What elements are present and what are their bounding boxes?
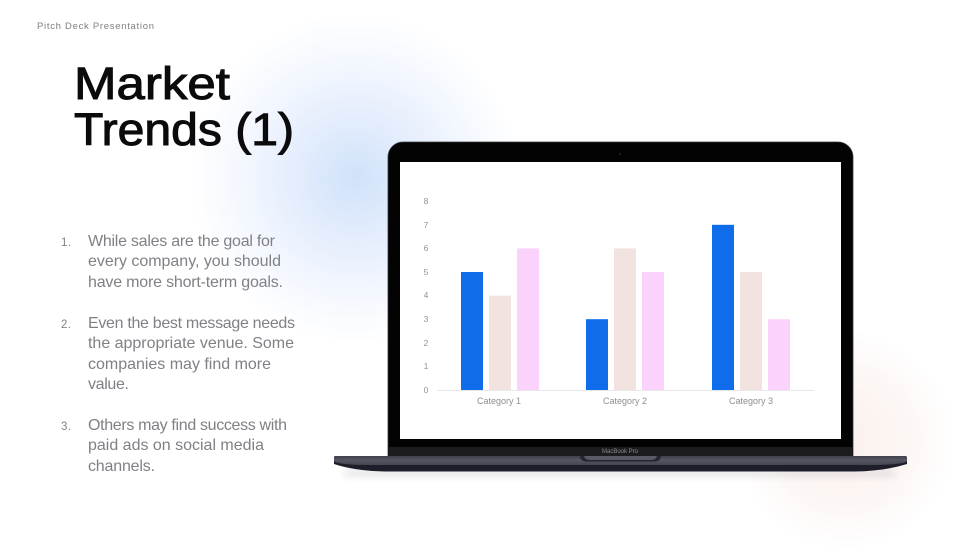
y axis labels: 6 — [424, 243, 429, 253]
list item 1 — [61, 233, 283, 291]
y axis labels: 7 — [424, 220, 429, 230]
background glow: pink — [735, 330, 955, 550]
list item 2: 2. — [61, 319, 71, 331]
numbered list — [61, 233, 295, 475]
y axis labels: 1 — [424, 361, 429, 371]
list item 1: While sales are the goal for — [88, 233, 276, 250]
base highlight band — [334, 456, 907, 465]
list item 3: 3. — [61, 421, 71, 433]
model label: MacBook Pro — [602, 449, 639, 455]
category labels — [477, 396, 773, 406]
title: Trends (1) — [74, 104, 294, 155]
bar chart — [424, 196, 814, 406]
y axis labels: 0 — [424, 385, 429, 395]
list item 3: paid ads on social media — [88, 437, 264, 454]
base notch — [580, 456, 661, 462]
category labels: Category 2 — [603, 396, 647, 406]
bars: category 2 — [586, 248, 664, 390]
background glow: blue — [190, 13, 520, 343]
laptop lid — [388, 142, 853, 456]
y axis labels: 2 — [424, 338, 429, 348]
list item 1: 1. — [61, 237, 71, 249]
category labels: Category 1 — [477, 396, 521, 406]
list item 2: value. — [88, 376, 129, 393]
laptop base — [334, 456, 907, 472]
y axis labels: 5 — [424, 267, 429, 277]
base notch inner — [584, 456, 657, 460]
laptop — [334, 142, 907, 476]
lid bottom hinge — [389, 447, 852, 456]
list item 3 — [61, 417, 287, 475]
header label: Pitch Deck Presentation — [37, 21, 154, 32]
bars: category 1 — [461, 248, 539, 390]
list item 2 — [61, 315, 295, 393]
list item 1: every company, you should — [88, 253, 281, 270]
list item 3: Others may find success with — [88, 417, 287, 434]
list item 2: companies may find more — [88, 356, 271, 373]
y axis labels: 8 — [424, 196, 429, 206]
title — [74, 58, 294, 155]
category labels: Category 3 — [729, 396, 773, 406]
camera — [619, 153, 621, 155]
list item 1: have more short-term goals. — [88, 274, 283, 291]
title: Market — [74, 58, 230, 109]
y axis labels — [424, 196, 429, 395]
y axis labels: 4 — [424, 290, 429, 300]
list item 2: Even the best message needs — [88, 315, 295, 332]
list item 3: channels. — [88, 458, 155, 475]
y axis labels: 3 — [424, 314, 429, 324]
screen — [400, 162, 841, 439]
axis line — [437, 390, 814, 391]
bars: category 3 — [712, 225, 790, 390]
list item 2: the appropriate venue. Some — [88, 335, 294, 352]
laptop shadow — [345, 470, 895, 476]
